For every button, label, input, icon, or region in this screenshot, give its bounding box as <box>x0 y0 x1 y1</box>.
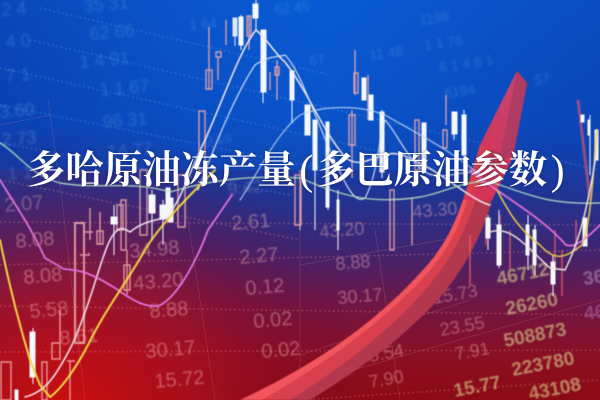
table numbers, red area: 43.20 <box>133 269 184 295</box>
table numbers, red area: 15.73 <box>431 280 479 308</box>
table numbers, red area: 43.20 <box>319 218 365 242</box>
table numbers, yellow: 46712 <box>495 259 551 290</box>
table numbers, blue area: 67 <box>308 51 326 69</box>
yellow line right <box>497 130 597 256</box>
faint grid lines <box>0 100 600 400</box>
table numbers, blue area: 96 31 <box>102 108 148 132</box>
table numbers, blue area <box>0 0 551 199</box>
table numbers, blue area: 1 4 91 <box>79 48 130 72</box>
table numbers, red area: 34.98 <box>129 237 180 263</box>
title: ) <box>551 148 565 194</box>
table numbers, blue area: 1198 <box>418 8 450 28</box>
table numbers, blue area: 0 19 <box>204 130 233 148</box>
table numbers, yellow: 223780 <box>510 348 576 381</box>
table numbers, blue area: 476 <box>498 99 524 118</box>
table numbers, blue area: 7 1 <box>5 64 31 86</box>
title: ( <box>299 148 313 194</box>
table numbers, blue area: 4 0 <box>5 30 31 52</box>
table numbers, blue area: 1 1 67 <box>99 76 150 100</box>
table numbers, red area: 2.07 <box>4 192 44 217</box>
table numbers, red area: 8.88 <box>335 251 371 274</box>
table numbers, red area: 30.17 <box>145 337 196 363</box>
table numbers, red area: 8.08 <box>15 228 55 253</box>
pink outlined candlesticks <box>1 15 447 400</box>
table numbers, yellow: 26260 <box>504 289 560 320</box>
table numbers, blue area: 2.73 <box>1 127 37 150</box>
yellow line <box>0 170 215 397</box>
table numbers, red area: 2.27 <box>239 244 279 269</box>
table numbers, red area: 0.02 <box>261 338 301 363</box>
table numbers, blue area: 1 1 76 <box>423 32 464 53</box>
green line <box>0 143 600 203</box>
table numbers, red area: 8.08 <box>23 264 63 289</box>
table numbers, red area: 23.55 <box>438 312 486 340</box>
table numbers, blue area: 1 1 <box>7 162 33 184</box>
table numbers, red area: 8.88 <box>149 298 189 323</box>
table numbers, red area: 5.58 <box>29 298 69 323</box>
red candlesticks near arrow <box>470 100 590 296</box>
blue-white long line <box>240 108 480 200</box>
table numbers, blue area: 6194 <box>443 81 476 101</box>
table numbers, red area: 5.54 <box>367 340 405 366</box>
table numbers, red area: 30.17 <box>337 284 383 308</box>
table numbers, blue area: 11 48 <box>368 42 404 63</box>
table numbers, yellow <box>452 259 600 400</box>
white line, second <box>198 55 482 199</box>
table numbers, red area: 7.91 <box>453 338 491 364</box>
red curved arrow <box>240 71 527 400</box>
table numbers, red area: 0.02 <box>253 308 293 333</box>
table numbers, red area: 2.61 <box>231 210 271 235</box>
magenta line <box>0 170 600 306</box>
table numbers, red area: 0.12 <box>245 275 285 300</box>
table numbers, blue area: 57 <box>533 70 551 88</box>
table numbers, red area: 7.90 <box>367 366 405 392</box>
white line right <box>490 150 597 270</box>
table numbers, red area: 43.30 <box>412 198 458 222</box>
title: 多哈原油冻产量 多巴原油参数 <box>27 150 547 192</box>
white line left ascent <box>25 30 490 397</box>
table numbers, blue area: 14 77 <box>107 138 153 162</box>
table numbers, red area: 15.72 <box>154 367 205 393</box>
table numbers, yellow: 508873 <box>502 319 568 352</box>
table numbers, blue area: 1 64 <box>189 15 218 33</box>
table numbers, blue area: 9.42 <box>227 176 263 199</box>
table numbers, red area <box>4 192 491 393</box>
table numbers, blue area: 62 66 <box>89 20 135 44</box>
table numbers, blue area: 6 1 4 8 1 <box>438 52 495 75</box>
table numbers, red area: 8 61 <box>59 325 99 350</box>
